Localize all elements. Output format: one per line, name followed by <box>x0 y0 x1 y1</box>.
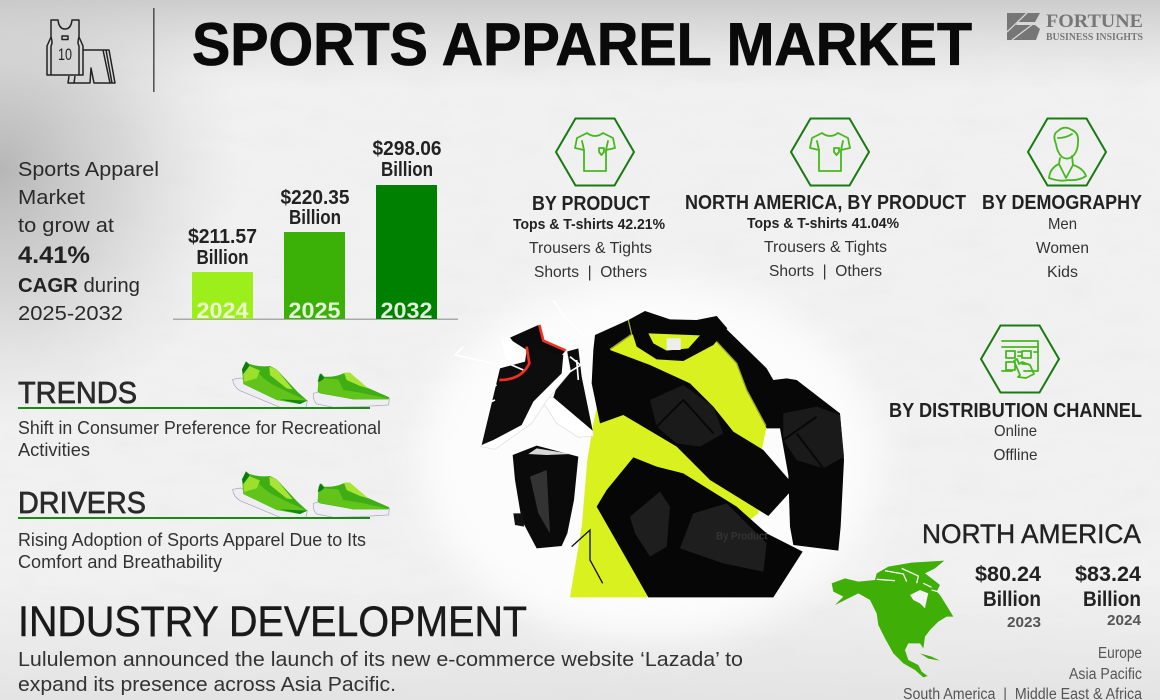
stat: 2023: 2023 <box>1007 614 1041 631</box>
text: CAGR summary: 2025-2032 <box>18 303 123 325</box>
bar: 2024 <box>188 226 257 323</box>
text: CAGR summary: CAGR during <box>18 275 140 297</box>
icon: t-shirt hexagon <box>556 118 634 186</box>
panel: by demography: Kids <box>1047 264 1078 281</box>
bar: 2024: 2024 <box>196 298 249 323</box>
bar: 2032: $298.06 <box>372 138 442 160</box>
panel: by demography: Women <box>1036 240 1089 257</box>
logo: BUSINESS INSIGHTS <box>1046 32 1143 43</box>
panel: north america <box>832 519 1142 700</box>
boot: rear <box>502 325 593 437</box>
bar chart <box>173 138 458 323</box>
photo: sports kit <box>455 300 844 597</box>
heading: trends: TRENDS <box>18 375 137 410</box>
divider <box>153 8 155 92</box>
stat: 2023 <box>975 563 1041 631</box>
icon: t-shirt hexagon <box>791 118 869 186</box>
panel: by demography: Men <box>1048 216 1077 233</box>
shin guard <box>513 446 578 548</box>
panel: by product <box>513 118 665 281</box>
panel: by demography: BY DEMOGRAPHY <box>982 192 1143 214</box>
heading: industry development: INDUSTRY DEVELOPMENT <box>18 598 527 646</box>
pants <box>597 457 803 597</box>
heading: north america: NORTH AMERICA <box>922 519 1141 549</box>
panel: trends <box>18 361 389 460</box>
text: CAGR summary: 4.41% <box>18 242 90 269</box>
bar: 2025 <box>280 187 350 323</box>
other regions: Europe <box>1098 645 1142 662</box>
drawstring <box>572 530 603 583</box>
small caption: By Product <box>716 530 768 542</box>
text: CAGR summary: Sports Apparel <box>18 159 159 181</box>
panel: by distribution channel: BY DISTRIBUTION CHANNEL <box>889 400 1142 422</box>
text: CAGR summary: to grow at <box>18 215 114 237</box>
panel: by product: BY PRODUCT <box>532 193 650 215</box>
panel: north america by product: Shorts | Others <box>769 263 882 280</box>
logo: FORTUNE <box>1046 11 1143 32</box>
stat: 2024 <box>1075 563 1142 629</box>
other regions <box>903 645 1142 700</box>
other regions: Asia Pacific <box>1069 666 1142 683</box>
jersey body <box>570 332 767 597</box>
text: drivers description <box>18 530 366 572</box>
bar: 2032: 2032 <box>380 298 432 323</box>
bar: 2032: Billion <box>381 159 433 181</box>
panel: by product: Tops & T-shirts 42.21% <box>513 217 665 233</box>
heading: drivers: DRIVERS <box>18 485 146 520</box>
boot: front <box>481 346 571 449</box>
jersey collar <box>610 311 766 426</box>
jersey left sleeve <box>592 320 795 516</box>
panel: by distribution channel: Offline <box>994 447 1038 464</box>
panel: by distribution channel: Online <box>994 423 1037 440</box>
icon: online store hexagon <box>981 326 1059 392</box>
shoes <box>233 471 389 517</box>
icon: jersey and shorts <box>47 20 115 83</box>
stat: 2024: $83.24 <box>1075 563 1141 586</box>
stat: 2024: Billion <box>1083 588 1141 611</box>
bar: 2025: $220.35 <box>280 187 350 209</box>
panel: industry development <box>18 598 743 696</box>
text: CAGR summary <box>18 159 159 325</box>
text: trends description: Shift in Consumer Preference for Recreational <box>18 418 381 438</box>
jersey right sleeve <box>717 316 844 551</box>
bar: 2024: $211.57 <box>188 226 257 248</box>
shoes <box>233 361 389 407</box>
laces <box>455 300 587 418</box>
stat: 2024: 2024 <box>1107 612 1142 629</box>
bar: 2024: Billion <box>196 247 248 269</box>
panel: by product: Trousers & Tights <box>529 240 652 257</box>
jersey pads <box>650 385 844 468</box>
title: SPORTS APPAREL MARKET <box>192 11 972 78</box>
text: trends description <box>18 418 381 460</box>
text: CAGR summary: Market <box>18 187 85 209</box>
logo <box>1007 11 1143 43</box>
panel: north america by product <box>685 118 966 280</box>
panel: north america by product: NORTH AMERICA, BY PRODUCT <box>685 192 966 214</box>
stat: 2023: $80.24 <box>975 563 1041 586</box>
panel: by product: Shorts | Others <box>534 264 647 281</box>
panel: by demography <box>982 118 1143 281</box>
bar: 2032 <box>372 138 442 323</box>
text: industry description: expand its presence across Asia Pacific. <box>18 673 396 696</box>
bar: 2025: Billion <box>289 207 341 229</box>
text: trends description: Activities <box>18 440 90 460</box>
text: drivers description: Comfort and Breathability <box>18 552 222 572</box>
text: drivers description: Rising Adoption of Sports Apparel Due to Its <box>18 530 366 550</box>
text: industry description: Lululemon announced the launch of its new e-commerce website ‘Lazada’ to <box>18 648 743 671</box>
icon: jersey and shorts: 10 <box>58 45 72 64</box>
icon: person hexagon <box>1028 118 1106 186</box>
panel: by distribution channel <box>889 326 1142 464</box>
stat: 2023: Billion <box>983 588 1041 611</box>
map: north america <box>832 561 953 677</box>
bar: 2025: 2025 <box>288 298 340 323</box>
text: industry description <box>18 648 743 696</box>
panel: north america by product: Trousers & Tights <box>764 239 887 256</box>
panel: north america by product: Tops & T-shirts 41.04% <box>747 216 899 232</box>
panel: drivers <box>18 471 389 572</box>
